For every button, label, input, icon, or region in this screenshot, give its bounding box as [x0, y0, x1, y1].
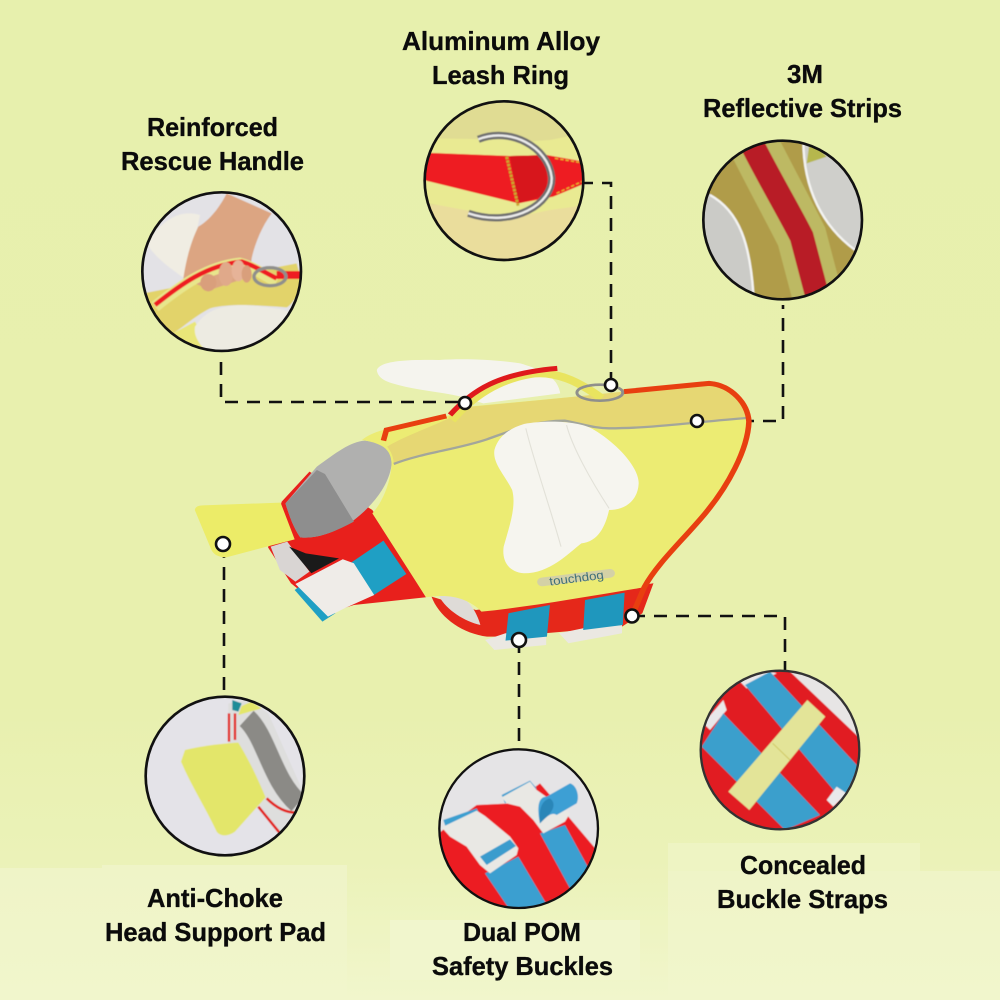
- icon: white strap buckles: [485, 625, 622, 650]
- icon: leash ring: [577, 385, 623, 401]
- icon: vest body: [362, 383, 749, 612]
- heading: head support pad: Head Support Pad: [105, 917, 326, 947]
- icon: side blue strap: [350, 541, 406, 596]
- panel: reflective strips photo: [702, 139, 864, 301]
- heading: concealed straps: Buckle Straps: [717, 884, 888, 914]
- heading: safety buckles: Safety Buckles: [432, 951, 613, 981]
- leader lines: [221, 183, 785, 748]
- icon: tan back panel: [387, 385, 747, 465]
- anchor dots: [216, 379, 703, 647]
- icon: grab handle: [450, 368, 623, 420]
- heading: leash ring: Leash Ring: [432, 60, 569, 90]
- icon: reflective strip: [394, 418, 747, 464]
- heading: leash ring: Aluminum Alloy: [402, 26, 601, 56]
- icon: red chest: [268, 472, 426, 613]
- heading: head support pad: Anti-Choke: [147, 883, 283, 913]
- icon: chest harness detail: [271, 542, 309, 582]
- heading: reflective strips: Reflective Strips: [703, 93, 902, 123]
- panel: safety buckles photo: [437, 747, 603, 913]
- icon: black strap: [289, 547, 339, 573]
- icon: wing seams: [526, 425, 609, 547]
- heading: safety buckles: [432, 917, 613, 981]
- icon: neck shade: [285, 470, 354, 538]
- icon: side wing: [494, 422, 639, 573]
- icon: belly red band: [432, 583, 653, 637]
- panel: head support pad photo: [144, 695, 306, 857]
- heading: leash ring: [402, 26, 601, 90]
- heading: reflective strips: 3M: [787, 59, 823, 89]
- icon: blue straps: [506, 593, 625, 641]
- panel: leash ring photo: [423, 100, 585, 262]
- heading: concealed straps: Concealed: [740, 850, 866, 880]
- panel: rescue handle photo: [141, 191, 302, 352]
- heading: rescue handle: [121, 112, 304, 176]
- panel: concealed straps photo: [700, 670, 860, 830]
- heading: head support pad: [105, 883, 326, 947]
- icon: neck opening: [285, 441, 392, 538]
- icon: top wing: [377, 359, 560, 403]
- icon: chin pad: [195, 503, 295, 557]
- vest illustration: [195, 359, 749, 650]
- icon: belly opening: [439, 593, 480, 625]
- heading: rescue handle: Rescue Handle: [121, 146, 304, 176]
- icon: side buckle: [295, 559, 374, 617]
- heading: concealed straps: [717, 850, 888, 914]
- heading: reflective strips: [703, 59, 902, 123]
- icon: lower blue strap end: [295, 582, 335, 622]
- brand logo: touchdog: [548, 568, 605, 588]
- heading: rescue handle: Reinforced: [147, 112, 278, 142]
- heading: safety buckles: Dual POM: [463, 917, 581, 947]
- icon: red piping: [383, 383, 749, 613]
